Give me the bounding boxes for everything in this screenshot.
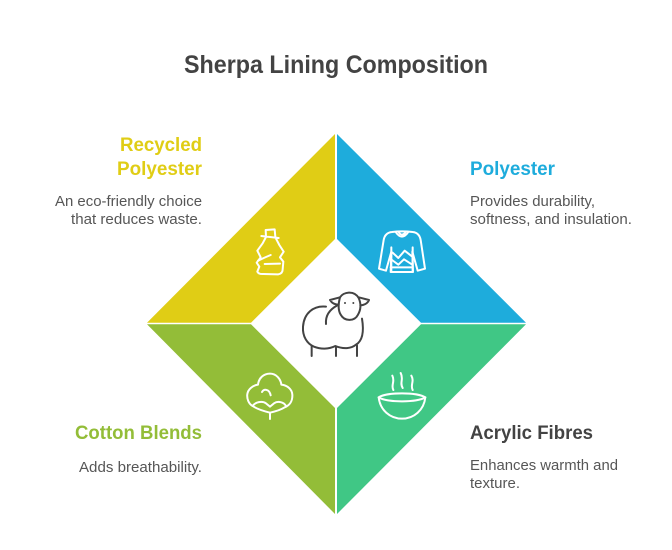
text: acrylic fibres description: Enhances warmth and <box>470 457 618 474</box>
text: polyester description: Provides durability, <box>470 193 595 210</box>
heading: recycled polyester: Polyester <box>117 159 203 180</box>
heading: recycled polyester: Recycled <box>120 135 202 156</box>
heading: recycled polyester <box>117 135 203 180</box>
icon: cotton <box>247 374 292 419</box>
text: cotton blends description: Adds breathability. <box>79 459 202 476</box>
text: recycled polyester description: An eco-friendly choice <box>55 193 202 210</box>
heading: polyester: Polyester <box>470 159 556 180</box>
heading: acrylic fibres: Acrylic Fibres <box>470 423 593 444</box>
panel: cotton blends <box>147 324 335 514</box>
text: recycled polyester description <box>55 193 202 228</box>
heading: cotton blends: Cotton Blends <box>75 423 202 444</box>
icon: sweater <box>379 231 425 272</box>
text: recycled polyester description: that reduces waste. <box>71 211 202 228</box>
icon: sheep <box>303 293 369 356</box>
text: acrylic fibres description: texture. <box>470 475 520 492</box>
text: acrylic fibres description <box>470 457 618 492</box>
title: Sherpa Lining Composition <box>184 51 488 79</box>
icon: steaming bowl <box>379 373 425 419</box>
panel: acrylic fibres <box>337 324 526 514</box>
panel: polyester <box>337 134 526 323</box>
text: polyester description <box>470 193 632 228</box>
panel: recycled polyester <box>147 134 335 323</box>
text: polyester description: softness, and insulation. <box>470 211 632 228</box>
icon: bottle <box>257 229 284 274</box>
